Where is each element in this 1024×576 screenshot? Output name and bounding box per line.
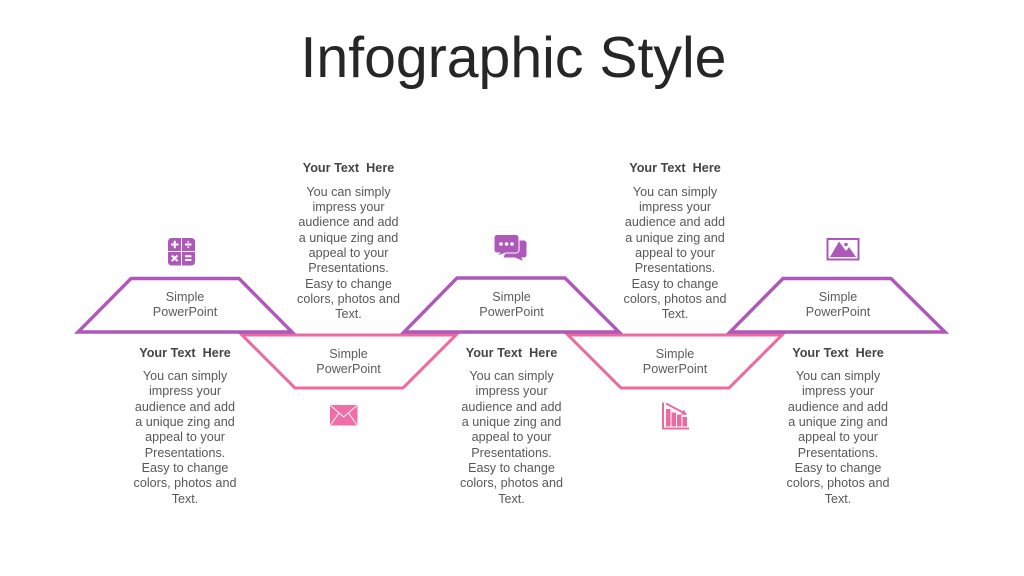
heading: top column 1: Your Text Here	[303, 161, 394, 175]
text block: top column 2	[624, 184, 726, 321]
text block: bottom column 3: Presentations.	[798, 446, 878, 460]
heading: bottom column 2: Your Text Here	[466, 346, 557, 360]
purple trapezoid 1	[78, 278, 292, 332]
text block: top column 1: impress your	[312, 200, 385, 214]
text block: bottom column 2: audience and add	[461, 400, 562, 414]
text block: top column 2: colors, photos and	[624, 292, 726, 306]
text block: bottom column 3: audience and add	[788, 400, 888, 414]
text block: top column 1: Presentations.	[308, 261, 389, 275]
label: pink 1: PowerPoint	[316, 362, 381, 376]
text block: bottom column 1	[134, 369, 236, 506]
text block: bottom column 3: a unique zing and	[788, 415, 888, 429]
text block: bottom column 3: appeal to your	[798, 430, 878, 444]
text block: bottom column 1: Easy to change	[142, 461, 228, 475]
pink trapezoid 1	[242, 335, 456, 388]
icon: picture	[828, 239, 858, 260]
text block: bottom column 3	[787, 369, 889, 506]
text block: top column 2: Easy to change	[632, 277, 718, 291]
text block: top column 1: appeal to your	[309, 246, 388, 260]
text block: bottom column 1: colors, photos and	[134, 476, 236, 490]
icon: chat bubbles	[494, 234, 527, 262]
text block: top column 2: audience and add	[625, 215, 725, 229]
heading: bottom column 1: Your Text Here	[139, 346, 231, 360]
label: pink 1: Simple	[329, 347, 368, 361]
label: purple 2: PowerPoint	[479, 305, 544, 319]
text block: top column 1: Easy to change	[305, 277, 392, 291]
text block: top column 1: audience and add	[298, 215, 399, 229]
text block: bottom column 1: impress your	[149, 384, 221, 398]
title: Infographic Style	[300, 26, 726, 90]
label: purple 1	[153, 290, 218, 319]
text block: top column 2: Presentations.	[635, 261, 715, 275]
text block: bottom column 1: a unique zing and	[135, 415, 235, 429]
text block: top column 2: a unique zing and	[625, 231, 725, 245]
label: purple 3	[806, 290, 870, 319]
label: purple 3: Simple	[819, 290, 857, 304]
text block: bottom column 3: Text.	[825, 492, 851, 506]
text block: bottom column 1: appeal to your	[145, 430, 225, 444]
text block: top column 1: colors, photos and	[297, 292, 400, 306]
icon: calculator	[168, 238, 195, 266]
icon: declining bar chart	[663, 402, 689, 428]
text block: bottom column 2: Easy to change	[468, 461, 555, 475]
text block: top column 1	[297, 184, 400, 321]
text block: bottom column 2: Presentations.	[471, 446, 552, 460]
text block: bottom column 1: audience and add	[135, 400, 235, 414]
label: pink 1	[316, 347, 381, 376]
heading: bottom column 3: Your Text Here	[792, 346, 884, 360]
label: purple 1: Simple	[166, 290, 204, 304]
text block: top column 1: You can simply	[306, 184, 391, 198]
label: purple 2	[479, 290, 544, 319]
text block: bottom column 3: impress your	[802, 384, 874, 398]
pink trapezoid 2	[568, 335, 782, 388]
text block: bottom column 2: impress your	[475, 384, 548, 398]
label: pink 2	[643, 347, 708, 376]
label: pink 2: PowerPoint	[643, 362, 707, 376]
text block: top column 2: You can simply	[633, 184, 717, 198]
label: purple 1: PowerPoint	[153, 305, 217, 319]
label: purple 3: PowerPoint	[806, 305, 870, 319]
label: purple 2: Simple	[492, 290, 531, 304]
text block: bottom column 1: You can simply	[143, 369, 227, 383]
text block: top column 2: Text.	[662, 307, 688, 321]
text block: bottom column 2: appeal to your	[472, 430, 551, 444]
label: pink 2: Simple	[656, 347, 694, 361]
text block: bottom column 3: Easy to change	[795, 461, 881, 475]
icon: envelope	[330, 405, 358, 426]
text block: bottom column 3: colors, photos and	[787, 476, 889, 490]
text block: top column 1: Text.	[335, 307, 362, 321]
text block: bottom column 2	[460, 369, 563, 506]
text block: bottom column 1: Presentations.	[145, 446, 225, 460]
text block: top column 1: a unique zing and	[299, 231, 398, 245]
text block: bottom column 3: You can simply	[796, 369, 880, 383]
text block: bottom column 2: a unique zing and	[462, 415, 561, 429]
text block: bottom column 2: Text.	[498, 492, 525, 506]
text block: top column 2: impress your	[639, 200, 711, 214]
text block: bottom column 2: You can simply	[469, 369, 554, 383]
text block: bottom column 1: Text.	[172, 492, 198, 506]
text block: top column 2: appeal to your	[635, 246, 715, 260]
text block: bottom column 2: colors, photos and	[460, 476, 563, 490]
purple trapezoid 2	[404, 278, 619, 332]
purple trapezoid 3	[730, 278, 945, 332]
heading: top column 2: Your Text Here	[629, 161, 721, 175]
